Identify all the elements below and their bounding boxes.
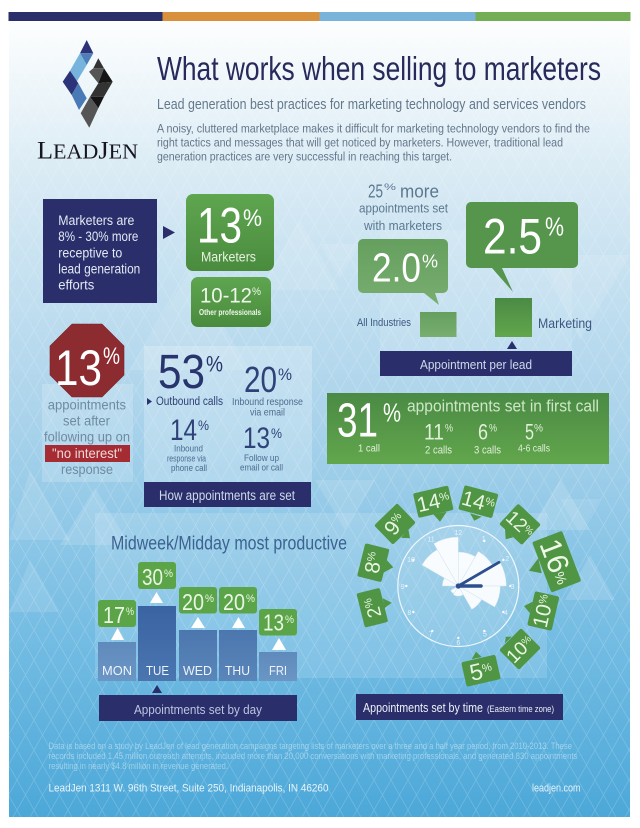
- text: no interest follow up: response: [61, 461, 113, 477]
- stat: 13% follow up: [240, 422, 283, 474]
- heading: 25% more: 25: [368, 181, 383, 201]
- bubble: 2%: %: [362, 597, 376, 609]
- stat: 10-12% other professionals: Other professionals: [199, 308, 261, 317]
- clock face: 11: [427, 536, 435, 544]
- bar: Wednesday 20%: %: [205, 593, 214, 605]
- methodology note: [48, 741, 578, 772]
- panel: marketers receptive: efforts: [58, 277, 95, 292]
- bubble: 2.0%: %: [422, 252, 438, 272]
- arrow: [152, 685, 162, 693]
- bar: Thursday 20%: 20: [223, 589, 245, 615]
- stat: 14% inbound phone: [167, 414, 209, 474]
- intro text: [157, 122, 590, 163]
- stat: 20% inbound email: Inbound response: [232, 397, 303, 408]
- stat: 10-12% other professionals: 10-12: [200, 285, 252, 308]
- bar: Wednesday 20%: WED: [183, 664, 212, 678]
- bar: Monday 17%: 17: [103, 602, 125, 628]
- bubble: 2.0%: [358, 239, 448, 305]
- stat: 13% marketers: %: [243, 205, 262, 232]
- chart: appointments by day: [98, 562, 297, 721]
- bubble: 5%: [461, 652, 501, 687]
- panel: appointments set in first call: appointments set in first call: [407, 397, 599, 416]
- stop sign: 13%: [50, 324, 124, 397]
- chart: appointment per lead: [357, 202, 592, 376]
- panel: appointments set in first call: 6: [478, 419, 488, 444]
- stat: 14% inbound phone: %: [198, 417, 209, 433]
- stat: 13% follow up: 13: [243, 422, 270, 455]
- bubble: 9%: [371, 500, 419, 548]
- stat: 53% outbound: [147, 346, 223, 408]
- clock face: 12: [454, 530, 462, 537]
- icon: diamond mark: [63, 40, 113, 128]
- panel: appointments set in first call: 3 calls: [474, 444, 501, 456]
- stat: 14% inbound phone: phone call: [171, 463, 207, 474]
- stat: 14% inbound phone: Inbound: [174, 444, 203, 455]
- chart: clock of appointments by time: [356, 485, 581, 720]
- stat: 20% inbound email: 20: [244, 359, 277, 400]
- panel: appointments set in first call: 11: [424, 419, 444, 444]
- heading: 25% more: appointments set: [359, 201, 448, 216]
- bar: Wednesday 20%: [179, 587, 217, 681]
- bubble: 14% left: [413, 485, 454, 522]
- bubble: 14% right: [458, 485, 498, 521]
- panel: marketers receptive: [43, 199, 157, 303]
- stop sign: 13%: 13: [55, 340, 102, 396]
- text: no interest follow up: following up on: [44, 429, 130, 445]
- panel: appointments set in first call: %: [534, 423, 543, 435]
- clock face: 7: [429, 632, 433, 638]
- stat: 10-12% other professionals: %: [252, 286, 261, 298]
- bar: Tuesday 30%: 30: [142, 564, 163, 590]
- stat: 13% marketers: Marketers: [201, 250, 256, 265]
- footer address: LeadJen 1311 W. 96th Street, Suite 250, Indianapolis, IN 46260: [48, 783, 328, 795]
- clock face: 6: [456, 640, 460, 647]
- panel: marketers receptive: 8% - 30% more: [58, 229, 138, 244]
- intro text: generation practices are very successful in reaching this target.: [157, 149, 452, 163]
- bubble: 2%: [356, 588, 392, 628]
- bubble: 10% right: [524, 591, 559, 631]
- caption bar: [356, 694, 563, 720]
- bubble: 2.5%: %: [545, 212, 564, 242]
- caption bar: [144, 482, 311, 507]
- text: no interest follow up: "no interest": [52, 445, 122, 461]
- methodology note: resulting in nearly $4.8 million in revenue generated.: [48, 761, 228, 772]
- bubble: 16%: %: [551, 569, 571, 587]
- stat: 14% inbound phone: 14: [170, 414, 197, 447]
- stat: 20% inbound email: via email: [250, 408, 285, 419]
- bar: Tuesday 30%: TUE: [146, 664, 169, 678]
- intro text: A noisy, cluttered marketplace makes it difficult for marketing technology vendors to find the: [157, 122, 590, 136]
- bubble: 12%: [499, 503, 541, 545]
- bubble: 5%: %: [481, 661, 493, 675]
- bar: Friday 13%: FRI: [269, 664, 287, 678]
- intro text: right tactics and messages that will get noticed by marketers. However, traditional lead: [157, 136, 563, 150]
- bar: Tuesday 30%: [138, 562, 176, 681]
- clock face: 10: [407, 557, 415, 564]
- bubble: 14% right: 14: [459, 487, 488, 515]
- bar: Tuesday 30%: %: [164, 568, 173, 580]
- bar: Friday 13%: 13: [263, 610, 284, 636]
- heading: 25% more: [359, 181, 448, 233]
- panel: marketers receptive: receptive to: [58, 245, 122, 260]
- bubble: 16%: 16: [533, 535, 575, 578]
- bar: Monday 17%: MON: [102, 664, 132, 678]
- bar: Thursday 20%: THU: [225, 664, 250, 678]
- caption bar: (Eastern time zone): [487, 704, 554, 714]
- clock face: [398, 526, 519, 647]
- panel: appointments set in first call: %: [489, 423, 497, 435]
- stat: 53% outbound: 53: [158, 346, 205, 399]
- bubble: 12%: %: [521, 524, 535, 538]
- bubble: 16%: [529, 531, 581, 593]
- stat: 13% marketers: [186, 194, 274, 271]
- stat: 13% follow up: %: [271, 425, 282, 441]
- panel: appointments set in first call: %: [383, 398, 401, 428]
- bubble: 2.0%: 2.0: [372, 245, 421, 291]
- panel: how appointments are set: [144, 346, 311, 507]
- clock face: 8: [407, 610, 411, 617]
- bubble: 10% bottom: [499, 628, 541, 670]
- bar: Monday 17%: [98, 600, 136, 681]
- panel: appointments set in first call: 31: [337, 395, 378, 448]
- clock face: 9: [401, 584, 405, 591]
- text: no interest follow up: set after: [63, 413, 110, 429]
- clock face: 2: [505, 556, 509, 563]
- panel: marketers receptive: lead generation: [58, 261, 140, 276]
- stat: 10-12% other professionals: [191, 277, 271, 327]
- caption bar: Appointments set by time: [363, 701, 483, 715]
- bubble: 2.5%: [466, 202, 578, 292]
- stat: 20% inbound email: %: [278, 365, 292, 384]
- clock hands: [456, 562, 499, 589]
- bubble: 14% left: %: [438, 490, 451, 504]
- bar: marketing: [495, 298, 592, 337]
- bubble: 10% right: %: [537, 593, 551, 605]
- bubble: 10% bottom: %: [520, 634, 534, 648]
- bar: Monday 17%: %: [126, 606, 134, 618]
- clock face: 5: [483, 632, 487, 638]
- caption bar: [380, 351, 572, 376]
- footer website: leadjen.com: [532, 783, 580, 795]
- heading: 25% more: more: [400, 181, 439, 201]
- heading: midweek midday: Midweek/Midday most productive: [111, 533, 347, 554]
- bar: all industries: [357, 312, 456, 337]
- bubble: 8%: [357, 543, 393, 583]
- caption bar: Appointment per lead: [420, 357, 532, 372]
- bubble: 14% left: 14: [415, 489, 443, 517]
- logo: LeadJen: [37, 40, 138, 164]
- bubble: 9%: %: [389, 510, 405, 526]
- heading: 25% more: %: [384, 182, 396, 192]
- bubble: 10% bottom: 10: [503, 638, 532, 668]
- bubble: 14% right: %: [484, 496, 497, 510]
- stat: 13% marketers: 13: [197, 198, 242, 254]
- panel: appointments set in first call: 4-6 calls: [518, 444, 550, 455]
- panel: marketers receptive: Marketers are: [58, 213, 134, 228]
- logo wordmark: LEADJEN: [37, 137, 138, 164]
- text: no interest follow up: appointments: [48, 396, 126, 412]
- bubble: 8%: 8: [361, 560, 385, 575]
- bar: Thursday 20%: %: [246, 593, 255, 605]
- panel: appointments set in first call: 5: [525, 419, 534, 444]
- bubble: 8%: %: [366, 551, 379, 562]
- arrow: [163, 226, 175, 239]
- bar: marketing: Marketing: [538, 315, 592, 331]
- stat: 13% follow up: Follow up: [244, 453, 279, 464]
- bubble: 5%: 5: [467, 658, 485, 686]
- panel: appointments set in first call: [327, 393, 609, 464]
- stat: 53% outbound: Outbound calls: [156, 396, 223, 408]
- caption bar: Appointments set by day: [134, 702, 262, 717]
- bar: Thursday 20%: [219, 587, 257, 681]
- bubble: 2.5%: 2.5: [483, 208, 542, 264]
- top colour bar: [8, 12, 630, 21]
- caption bar: How appointments are set: [159, 488, 295, 503]
- translucent content panels: [42, 230, 572, 678]
- bar: all industries: All Industries: [357, 317, 411, 329]
- clock face: 4: [504, 610, 508, 617]
- heading: 25% more: with marketers: [363, 218, 442, 233]
- panel: appointments set in first call: 1 call: [358, 444, 380, 455]
- stat: 20% inbound email: [232, 359, 303, 419]
- panel: appointments set in first call: 2 calls: [425, 444, 452, 456]
- arrow: [507, 341, 517, 349]
- stop sign: 13%: %: [103, 343, 120, 370]
- bar: Friday 13%: %: [285, 614, 294, 626]
- bubble: 10% right: 10: [529, 602, 557, 630]
- text: no interest follow up: [44, 396, 130, 477]
- panel: appointments set in first call: %: [445, 423, 453, 435]
- caption bar: [99, 695, 297, 721]
- bubble: 2%: 2: [363, 604, 386, 620]
- clock face: 3: [511, 584, 515, 591]
- stat: 53% outbound: %: [206, 352, 223, 377]
- bubble: 9%: 9: [380, 517, 405, 540]
- bar: Friday 13%: [259, 609, 297, 681]
- clock face: 1: [482, 536, 486, 543]
- bubble: 12%: 12: [501, 507, 531, 537]
- stat: 14% inbound phone: response via: [167, 454, 207, 465]
- bar: Wednesday 20%: 20: [182, 589, 204, 615]
- stat: 13% follow up: email or call: [240, 463, 283, 474]
